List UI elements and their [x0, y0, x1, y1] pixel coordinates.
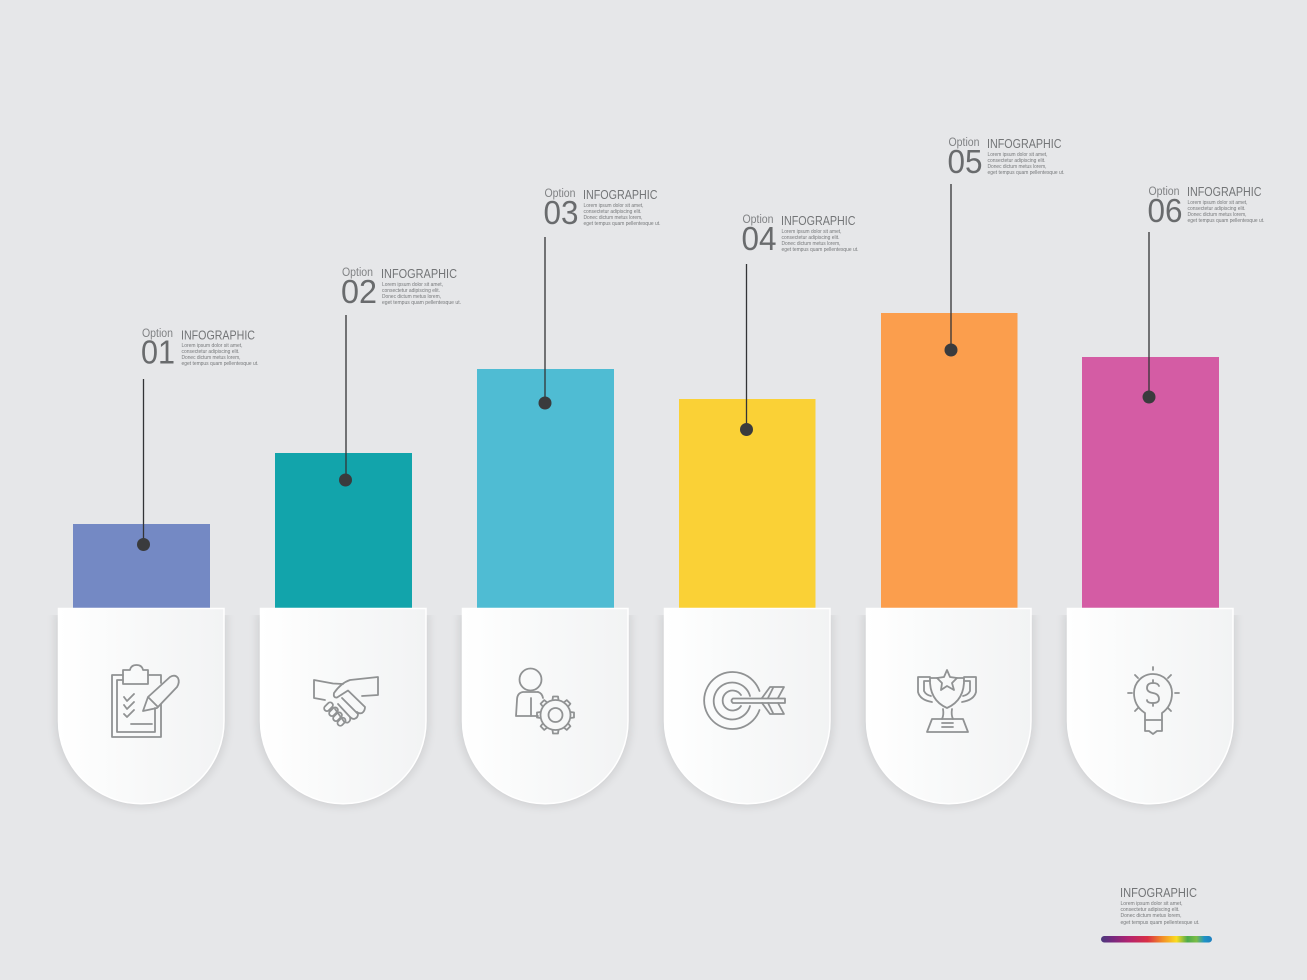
- icon: light bulb with dollar: [1128, 667, 1179, 734]
- icon: target with arrow: [704, 672, 785, 729]
- label 01: consectetur adipiscing elit.: [182, 349, 240, 355]
- label 06: Option: [1148, 186, 1180, 198]
- label 05: INFOGRAPHIC: [987, 137, 1062, 151]
- label 03: [544, 188, 660, 232]
- label 05: [948, 137, 1064, 181]
- label 06: Donec dictum metus lorem,: [1188, 212, 1246, 218]
- label 06: [1148, 185, 1264, 230]
- label 02: INFOGRAPHIC: [381, 267, 457, 281]
- footer legend: Lorem ipsum dolor sit amet,: [1120, 901, 1182, 907]
- label 03: 03: [544, 195, 578, 232]
- card 05: [864, 608, 1033, 806]
- bar 05: [881, 313, 1018, 609]
- label 03: Donec dictum metus lorem,: [584, 215, 642, 221]
- bar 02: [275, 453, 412, 609]
- label 02: Option: [342, 267, 373, 279]
- bar 04: [679, 399, 816, 609]
- label 06: consectetur adipiscing elit.: [1188, 206, 1246, 212]
- label 01: Option: [142, 328, 173, 340]
- bar 01: [73, 524, 210, 609]
- label 06: 06: [1148, 193, 1182, 230]
- label 03: Lorem ipsum dolor sit amet,: [584, 203, 644, 209]
- card 02: [258, 608, 428, 806]
- label 05: consectetur adipiscing elit.: [988, 158, 1046, 164]
- footer legend: [1101, 886, 1212, 942]
- card 06: [1065, 608, 1235, 806]
- connector 06: [1142, 232, 1156, 404]
- connector 03: [538, 237, 552, 410]
- card 01: [56, 608, 226, 806]
- rainbow bar: [1101, 936, 1212, 942]
- label 01: [141, 328, 258, 372]
- label 06: eget tempus quam pellentesque ut.: [1188, 218, 1264, 224]
- label 05: Lorem ipsum dolor sit amet,: [988, 152, 1048, 158]
- card 03: [460, 608, 630, 806]
- bar 03: [477, 369, 614, 609]
- label 04: consectetur adipiscing elit.: [782, 235, 840, 241]
- label 04: Lorem ipsum dolor sit amet,: [782, 229, 842, 235]
- icon: trophy with star: [918, 670, 976, 732]
- label 05: Option: [948, 137, 980, 149]
- label 02: [341, 267, 461, 311]
- bar 06: [1082, 357, 1219, 609]
- label 04: Option: [742, 214, 774, 226]
- footer legend: Donec dictum metus lorem,: [1120, 913, 1182, 919]
- footer legend: INFOGRAPHIC: [1120, 886, 1197, 900]
- connector 02: [339, 315, 352, 486]
- connector 05: [944, 184, 958, 356]
- label 03: INFOGRAPHIC: [583, 188, 658, 202]
- icon: clipboard with pen: [112, 665, 179, 737]
- label 02: eget tempus quam pellentesque ut.: [382, 300, 461, 306]
- label 03: consectetur adipiscing elit.: [584, 209, 642, 215]
- label 04: [742, 214, 858, 258]
- label 02: consectetur adipiscing elit.: [382, 288, 440, 294]
- label 05: 05: [948, 144, 982, 181]
- label 01: 01: [141, 334, 175, 372]
- label 06: INFOGRAPHIC: [1187, 185, 1262, 199]
- label 01: INFOGRAPHIC: [181, 328, 255, 342]
- label 05: Donec dictum metus lorem,: [988, 164, 1046, 170]
- label 04: INFOGRAPHIC: [781, 214, 856, 228]
- label 01: eget tempus quam pellentesque ut.: [182, 361, 258, 367]
- label 02: Lorem ipsum dolor sit amet,: [382, 282, 443, 288]
- label 04: Donec dictum metus lorem,: [782, 241, 840, 247]
- footer legend: consectetur adipiscing elit.: [1120, 907, 1180, 913]
- label 03: eget tempus quam pellentesque ut.: [584, 221, 660, 227]
- card 04: [662, 608, 832, 806]
- connector 04: [740, 264, 753, 436]
- label 03: Option: [544, 188, 576, 200]
- icon: person with gear: [516, 668, 574, 734]
- label 02: 02: [341, 274, 377, 311]
- label 05: eget tempus quam pellentesque ut.: [988, 170, 1064, 176]
- label 06: Lorem ipsum dolor sit amet,: [1188, 200, 1248, 206]
- label 04: eget tempus quam pellentesque ut.: [782, 247, 858, 253]
- footer legend: eget tempus quam pellentesque ut.: [1120, 920, 1200, 926]
- label 04: 04: [742, 221, 776, 258]
- icon: handshake: [314, 677, 378, 727]
- label 01: Donec dictum metus lorem,: [182, 355, 240, 361]
- connector 01: [137, 379, 150, 551]
- label 01: Lorem ipsum dolor sit amet,: [182, 343, 242, 349]
- label 02: Donec dictum metus lorem,: [382, 294, 441, 300]
